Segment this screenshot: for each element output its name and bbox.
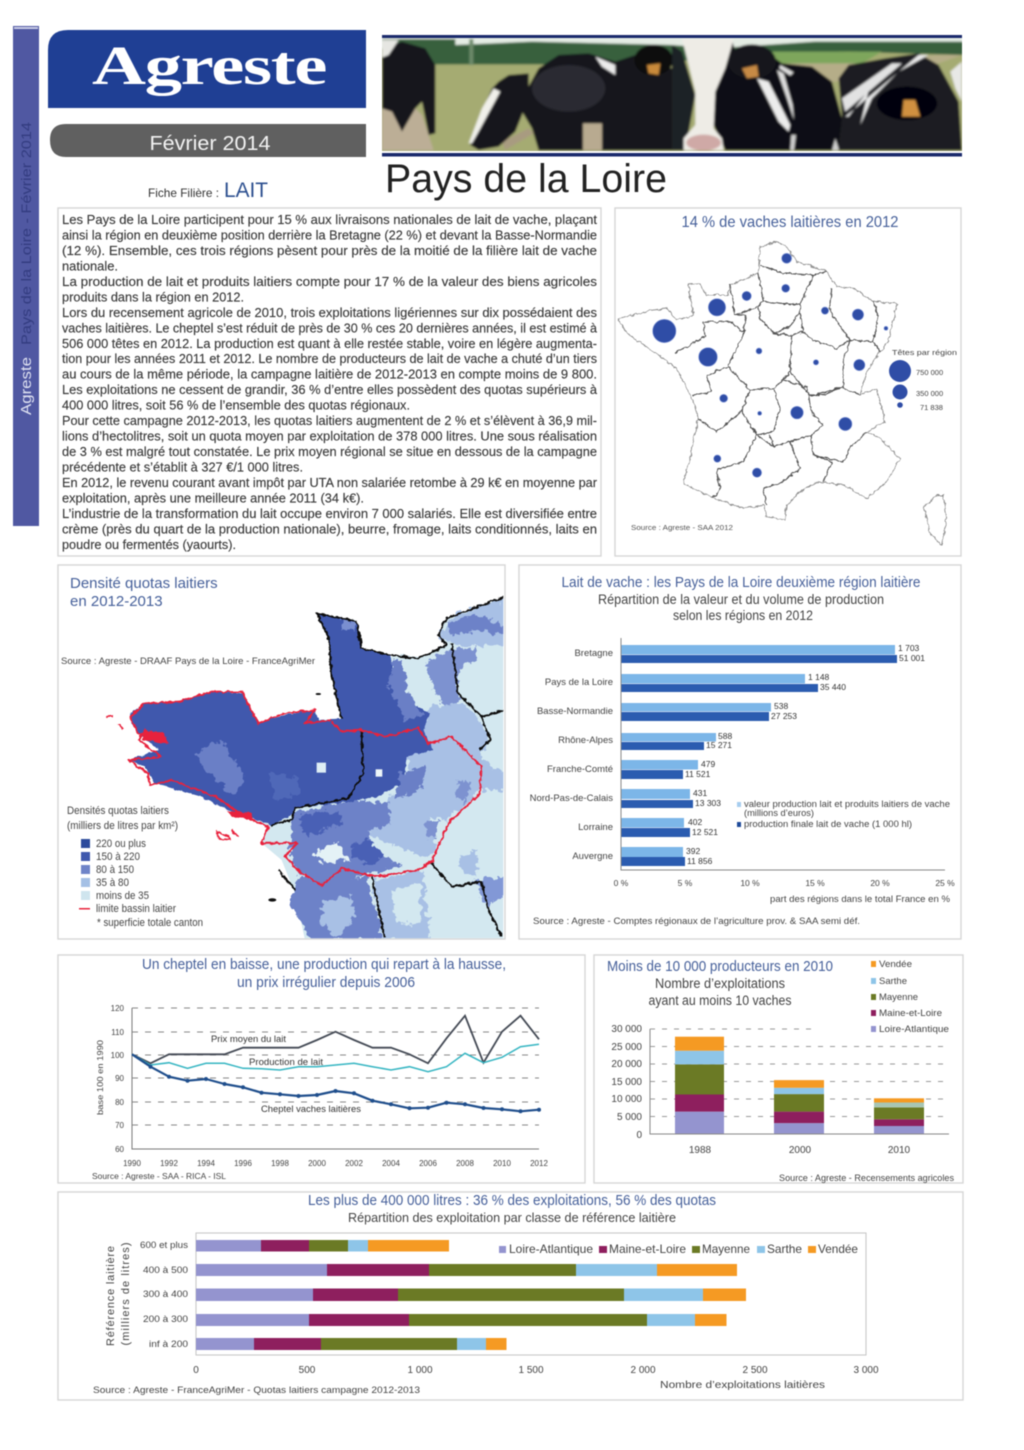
x axis years: 2000	[308, 1159, 326, 1168]
quota class labels: 300 à 400	[143, 1289, 188, 1299]
quota y axis title	[105, 1242, 132, 1346]
stacked chart heading: Moins de 10 000 producteurs en 2010	[607, 958, 833, 975]
y axis title: base 100 en 1990	[95, 1040, 105, 1115]
bar chart legend: (millions d’euros)	[744, 808, 814, 818]
x axis years: 1996	[234, 1159, 252, 1168]
x axis years: 1992	[160, 1159, 178, 1168]
panel: introduction text: 400 000 litres, soit 56 % de l’ensemble des quotas régionaux.	[62, 398, 410, 413]
stacked chart heading	[607, 958, 833, 1008]
region labels: Pays de la Loire	[545, 677, 613, 688]
quota class labels: 600 et plus	[140, 1240, 189, 1250]
panel: introduction text: tion pour les années 2011 et 2012. Le nombre de producteurs de lait de vache a chuté d’un tiers	[62, 351, 597, 366]
quota class labels: 200 à 300	[143, 1314, 188, 1324]
side band with vertical title: Pays de la Loire - Février 2014	[18, 122, 34, 345]
y axis labels: 60	[115, 1145, 125, 1154]
region labels: Lorraine	[578, 822, 613, 833]
plot frame	[196, 1233, 866, 1355]
photo of dairy cows	[379, 35, 965, 157]
panel: introduction text: Pour cette campagne 2012-2013, les quotas laitiers augmentent de 2 % et s’élèvent à 36,9 mil-	[62, 413, 597, 428]
y axis labels	[111, 1004, 125, 1154]
date banner	[50, 124, 366, 157]
stacked chart x labels: 2010	[888, 1145, 911, 1156]
fiche filière label: LAIT	[224, 179, 268, 202]
panel: introduction text: exploitation, après une meilleure année 2011 (34 k€).	[62, 490, 364, 505]
quota class labels	[140, 1240, 189, 1349]
stacked chart y labels: 20 000	[611, 1059, 642, 1070]
bar value labels: 51 001	[899, 653, 925, 663]
bar chart axis labels: 15 %	[805, 878, 825, 888]
stacked chart y labels	[611, 1024, 642, 1141]
quota y axis title: (milliers de litres)	[120, 1242, 132, 1346]
density map legend: 35 à 80	[96, 877, 129, 889]
panel: introduction text: vaches laitières. Le cheptel s’est réduit de près de 30 % ces 20 dernières années, il est estimé à	[62, 320, 598, 335]
quota x axis labels: 500	[299, 1365, 316, 1376]
quota class labels: inf à 200	[149, 1339, 188, 1349]
bar value labels	[685, 643, 925, 866]
bar chart heading: Répartition de la valeur et du volume de production	[598, 592, 884, 607]
bar chart axis labels	[614, 878, 955, 888]
bar 300 à 400	[196, 1288, 746, 1301]
bar chart axis labels: 20 %	[870, 878, 890, 888]
series: milk production: Production de lait	[249, 1057, 324, 1067]
panel: farms by quota class	[58, 1192, 963, 1400]
bars by region	[621, 638, 945, 870]
stacked chart legend: Sarthe	[879, 976, 907, 987]
quota x axis labels: 1 000	[407, 1365, 433, 1376]
x axis years: 2008	[456, 1159, 474, 1168]
region labels: Basse-Normandie	[537, 706, 613, 717]
stacked chart legend	[871, 959, 949, 1035]
panel: introduction text: Lors du recensement agricole de 2010, trois exploitations ligériennes sur dix possédaient des	[62, 305, 597, 320]
bar value labels: 1 148	[808, 672, 830, 682]
quota legend: Mayenne	[702, 1242, 750, 1256]
panel: introduction text: Les exploitations ne cessent de grandir, 36 % d’entre elles possèdent des quotas supérieurs à	[62, 382, 598, 397]
stacked chart heading: Nombre d’exploitations	[655, 976, 785, 991]
bar chart axis labels: 0 %	[614, 878, 629, 888]
quota x axis labels: 2 000	[630, 1365, 656, 1376]
panel: introduction text: En 2012, le revenu courant avant impôt par UTA non salariée retombe à 29 k€ en moyenne par	[62, 475, 598, 490]
quota legend: Loire-Atlantique	[509, 1242, 593, 1256]
x axis years: 2012	[530, 1159, 548, 1168]
map title: 14 % de vaches laitières en 2012	[682, 214, 899, 231]
panel: introduction text: nationale.	[62, 258, 118, 273]
series: milk price	[132, 1016, 539, 1063]
column 1988	[675, 1037, 724, 1134]
region labels: Nord-Pas-de-Calais	[530, 793, 613, 804]
bar 200 à 300	[196, 1314, 726, 1326]
grid and axes	[132, 1008, 539, 1149]
y axis labels: 100	[111, 1051, 125, 1060]
density map title: en 2012-2013	[70, 593, 163, 610]
y axis labels: 90	[115, 1074, 125, 1083]
panel: line chart	[58, 955, 585, 1183]
bar chart axis labels: 5 %	[678, 878, 693, 888]
bar value labels: 402	[688, 817, 702, 827]
stacked chart y labels: 10 000	[611, 1094, 642, 1105]
bar value labels: 27 253	[771, 711, 797, 721]
bar inf à 200	[196, 1338, 506, 1350]
Agreste logo banner	[48, 30, 366, 108]
stacked chart legend: Maine-et-Loire	[879, 1008, 942, 1019]
density map legend: 150 à 220	[96, 851, 140, 863]
stacked chart y labels: 15 000	[611, 1077, 642, 1088]
quota x axis labels: 2 500	[742, 1365, 768, 1376]
fiche filière label: Fiche Filière :	[148, 186, 219, 200]
panel: introduction text	[58, 208, 601, 556]
column 2010	[874, 1098, 924, 1134]
stacked chart x labels: 2000	[789, 1145, 812, 1156]
France regions map with proportional circles	[618, 242, 947, 545]
density map title: Densité quotas laitiers	[70, 575, 218, 592]
column 2000	[774, 1080, 824, 1134]
map legend	[889, 348, 957, 412]
series: dairy herd	[132, 1054, 541, 1114]
stacked chart legend: Vendée	[879, 959, 912, 970]
line chart title: Un cheptel en baisse, une production qui repart à la hausse,	[142, 956, 506, 973]
panel: regional bar chart	[519, 565, 961, 939]
quota legend: Sarthe	[767, 1242, 802, 1256]
density map source: Source : Agreste - DRAAF Pays de la Loire - FranceAgriMer	[61, 656, 315, 667]
density choropleth of western France	[107, 597, 507, 940]
bar chart heading	[562, 574, 920, 623]
panel: introduction text: poudre ou fermentés (yaourts).	[62, 537, 236, 552]
bar value labels: 431	[693, 788, 707, 798]
region labels: Auvergne	[572, 851, 613, 862]
bar value labels: 11 521	[685, 769, 711, 779]
page title: Pays de la Loire	[385, 157, 667, 201]
side band with vertical title: Agreste	[18, 357, 35, 415]
panel: introduction text: ainsi la région en deuxième position derrière la Bretagne (22 %) et devant la Basse-Normandie	[62, 228, 597, 242]
map legend: 350 000	[916, 389, 943, 398]
region labels: Bretagne	[574, 648, 613, 659]
quota y axis title: Référence laitière	[105, 1246, 117, 1346]
series: dairy herd: Cheptel vaches laitières	[261, 1104, 362, 1114]
bar value labels: 12 521	[692, 827, 718, 837]
stacked chart heading: ayant au moins 10 vaches	[648, 993, 792, 1008]
bar value labels: 392	[686, 846, 700, 856]
quota chart source: Source : Agreste - FranceAgriMer - Quotas laitiers campagne 2012-2013	[93, 1385, 420, 1396]
bar chart heading: selon les régions en 2012	[673, 608, 813, 623]
fiche filière label	[148, 179, 268, 202]
panel: introduction text: La production de lait et produits laitiers compte pour 17 % de la valeur des biens agricoles	[62, 274, 597, 289]
bar value labels: 479	[701, 759, 715, 769]
stacked chart y labels: 0	[636, 1130, 642, 1141]
x axis years: 2002	[345, 1159, 363, 1168]
region labels: Franche-Comté	[547, 764, 613, 775]
y axis labels: 70	[115, 1121, 125, 1130]
stacked chart y labels: 30 000	[611, 1024, 642, 1035]
date banner: Février 2014	[150, 133, 270, 155]
quota x axis title: Nombre d’exploitations laitières	[660, 1380, 825, 1391]
bar 600 et plus	[196, 1240, 449, 1252]
x axis years: 1994	[197, 1159, 215, 1168]
Agreste logo banner: Agreste	[92, 35, 326, 97]
bar value labels: 13 303	[695, 798, 721, 808]
panel: introduction text: précédente et s’établit à 327 €/1 000 litres.	[62, 460, 303, 474]
density map legend: * superficie totale canton	[97, 917, 203, 929]
stacked chart legend: Loire-Atlantique	[879, 1024, 949, 1035]
series: milk production	[132, 1044, 539, 1072]
bar chart legend: production finale lait de vache (1 000 hl)	[744, 819, 912, 829]
bar chart legend: valeur production lait et produits laitiers de vache	[744, 799, 950, 809]
x axis years: 1990	[123, 1159, 141, 1168]
panel: introduction text: 506 000 têtes en 2012. La production est quant à elle restée stable, voire en légère augmenta-	[62, 336, 597, 351]
panel: milk quota density map	[58, 565, 507, 940]
density map legend: 80 à 150	[96, 864, 134, 876]
bar value labels: 35 440	[820, 682, 846, 692]
map legend: 71 838	[920, 403, 943, 412]
line chart title: un prix irrégulier depuis 2006	[237, 974, 415, 991]
y axis labels: 110	[111, 1028, 125, 1037]
stacked chart y labels: 5 000	[617, 1112, 642, 1123]
bar chart axis labels: 25 %	[935, 878, 955, 888]
quota chart heading	[308, 1193, 716, 1225]
line chart source: Source : Agreste - SAA - RICA - ISL	[92, 1171, 226, 1181]
series: milk price: Prix moyen du lait	[211, 1034, 287, 1044]
quota x axis labels	[193, 1365, 879, 1376]
map source: Source : Agreste - SAA 2012	[631, 523, 733, 532]
bar value labels: 538	[774, 701, 788, 711]
line chart title	[142, 956, 506, 991]
region labels	[530, 648, 613, 862]
bar 400 à 500	[196, 1264, 737, 1276]
region labels: Rhône-Alpes	[558, 735, 613, 746]
bar value labels: 588	[718, 731, 732, 741]
panel: introduction text: L’industrie de la transformation du lait occupe environ 7 000 salariés. Elle est diversifiée entre	[62, 506, 597, 521]
x axis years: 2010	[493, 1159, 511, 1168]
stacked chart axes	[650, 1029, 949, 1134]
bar value labels: 15 271	[706, 740, 732, 750]
x axis years: 2006	[419, 1159, 437, 1168]
quota legend: Maine-et-Loire	[609, 1242, 686, 1256]
panel: introduction text: au cours de la même période, la campagne laitière de 2012-2013 en compte moins de 9 800.	[62, 367, 597, 382]
quota chart heading: Les plus de 400 000 litres : 36 % des exploitations, 56 % des quotas	[308, 1193, 716, 1209]
panel: introduction text: lions d’hectolitres, soit un quota moyen par exploitation de 378 000 litres. Une sous réalisation	[62, 429, 597, 444]
stacked chart source: Source : Agreste - Recensements agricoles	[779, 1173, 954, 1184]
x axis years	[123, 1159, 548, 1168]
density map legend: Densités quotas laitiers	[67, 805, 169, 817]
bar chart heading: Lait de vache : les Pays de la Loire deuxième région laitière	[562, 574, 920, 591]
quota class labels: 400 à 500	[143, 1265, 188, 1275]
panel: regional bar chart: part des régions dans le total France en %	[770, 894, 950, 904]
quota chart heading: Répartition des exploitation par classe de référence laitière	[348, 1210, 676, 1225]
bar value labels: 1 703	[898, 643, 920, 653]
density map legend: 220 ou plus	[96, 838, 146, 850]
density map legend	[67, 805, 203, 929]
map legend: Têtes par région	[892, 348, 957, 357]
x axis years: 2004	[382, 1159, 400, 1168]
panel: introduction text: crème (près du quart de la production nationale), beurre, fromage, laits conditionnés, laits en	[62, 521, 597, 536]
y axis labels: 120	[111, 1004, 125, 1013]
density map legend: moins de 35	[96, 890, 149, 902]
stacked chart y labels: 25 000	[611, 1042, 642, 1053]
panel: introduction text: de 3 % est malgré tout constatée. Le prix moyen régional se situe en dessous de la campagne	[62, 444, 597, 459]
stacked chart grid	[650, 1029, 949, 1116]
bar value labels: 11 856	[687, 856, 713, 866]
quota legend	[499, 1242, 858, 1256]
density map legend: (milliers de litres par km²)	[67, 820, 178, 832]
bar chart legend	[737, 799, 950, 829]
density map legend: limite bassin laitier	[96, 903, 176, 915]
panel: map of dairy cows in France	[615, 208, 961, 556]
panel: stacked columns, producers	[594, 955, 963, 1184]
panel: introduction text: (12 %). Ensemble, ces trois régions pèsent pour près de la moitié de la filière lait de vache	[62, 243, 597, 258]
stacked chart legend: Mayenne	[879, 992, 918, 1003]
quota x axis labels: 3 000	[853, 1365, 879, 1376]
quota legend: Vendée	[818, 1242, 858, 1256]
quota x axis labels: 0	[193, 1365, 199, 1376]
y axis labels: 80	[115, 1098, 125, 1107]
panel: introduction text: Les Pays de la Loire participent pour 15 % aux livraisons nationales de lait de vache, plaçant	[62, 212, 597, 227]
panel: introduction text: produits dans la région en 2012.	[62, 289, 244, 304]
x axis years: 1998	[271, 1159, 289, 1168]
bar chart source: Source : Agreste - Comptes régionaux de l’agriculture prov. & SAA semi déf.	[533, 916, 860, 926]
map legend: 750 000	[916, 368, 943, 377]
quota x axis labels: 1 500	[518, 1365, 544, 1376]
side band with vertical title	[13, 26, 39, 526]
stacked chart x labels: 1988	[689, 1145, 712, 1156]
bar chart axis labels: 10 %	[740, 878, 760, 888]
stacked chart x labels	[689, 1145, 911, 1156]
